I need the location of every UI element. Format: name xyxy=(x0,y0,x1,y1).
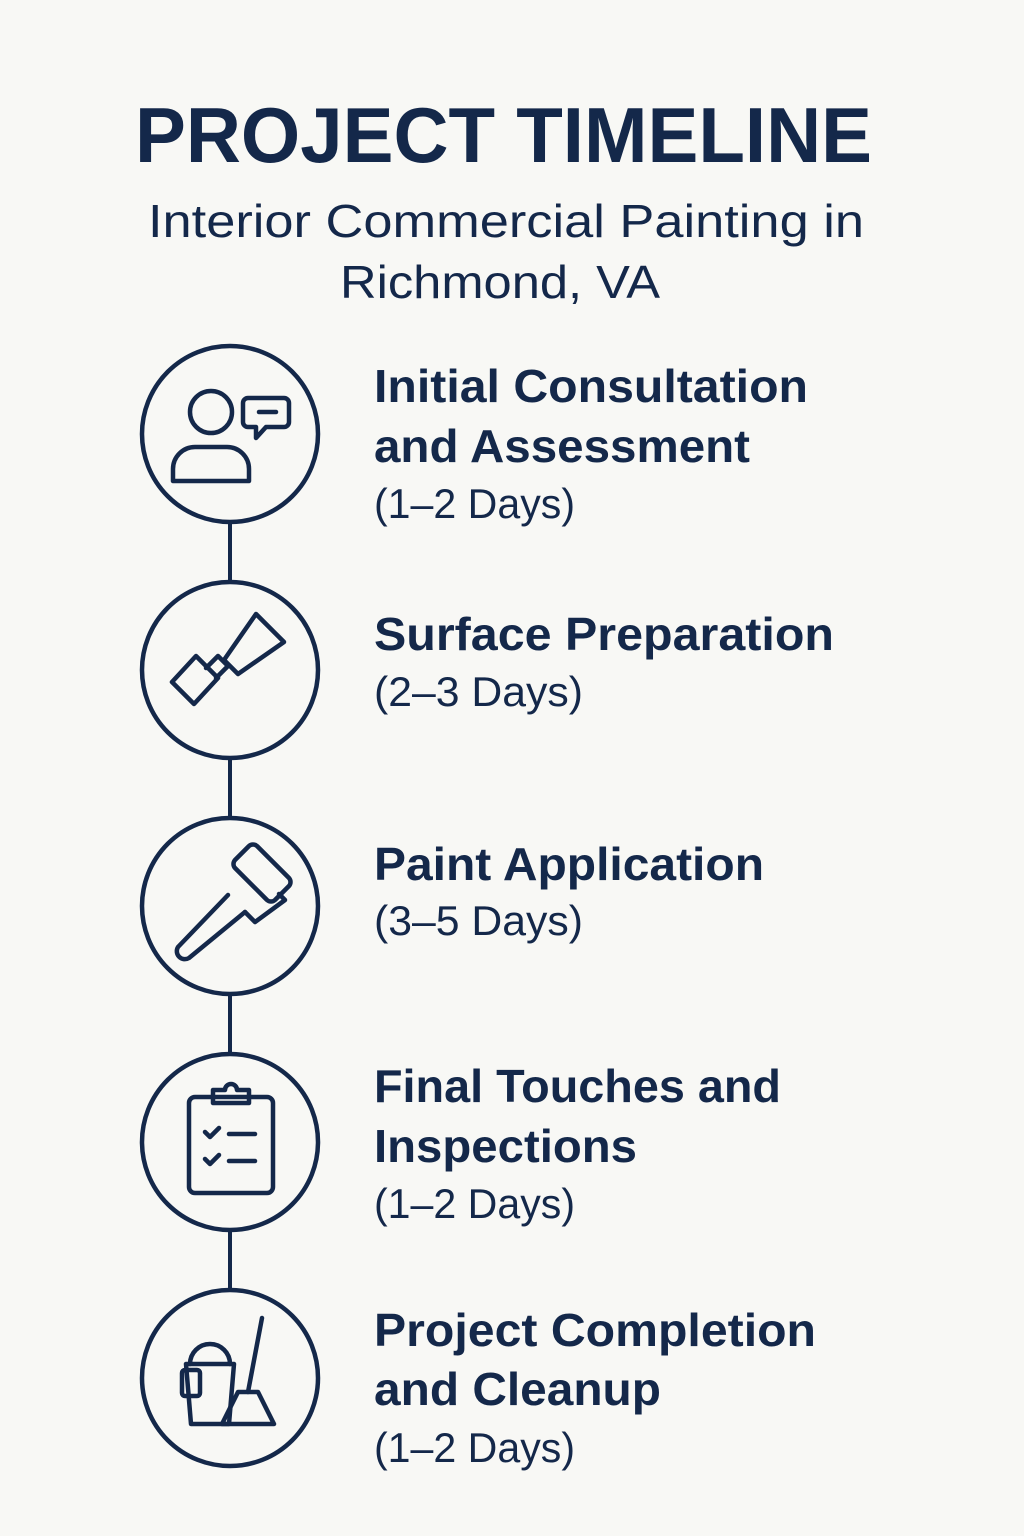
icon: clipboard checklist xyxy=(142,1054,318,1230)
text: step 4: Final Touches and xyxy=(374,1060,781,1112)
text: step 5: (1–2 Days) xyxy=(374,1424,575,1471)
text: step 5: Project Completion xyxy=(374,1304,816,1356)
subtitle: Interior Commercial Painting in xyxy=(148,195,864,247)
text: step 3 xyxy=(374,838,764,944)
step 3 xyxy=(142,818,764,994)
icon: bucket and broom xyxy=(142,1290,318,1466)
icon: paint roller xyxy=(142,818,318,994)
text: step 3: (3–5 Days) xyxy=(374,897,583,944)
text: step 1 xyxy=(374,360,808,527)
text: step 4: Inspections xyxy=(374,1120,637,1172)
text: step 2: (2–3 Days) xyxy=(374,668,583,715)
icon: putty knife xyxy=(142,582,318,758)
text: step 3: Paint Application xyxy=(374,838,764,890)
text: step 4: (1–2 Days) xyxy=(374,1180,575,1227)
subtitle: Richmond, VA xyxy=(340,256,660,308)
step 2 xyxy=(142,582,834,758)
icon: consultation xyxy=(142,346,318,522)
subtitle xyxy=(148,195,864,308)
timeline connector xyxy=(228,520,232,1295)
text: step 1: and Assessment xyxy=(374,420,750,472)
step 1 xyxy=(142,346,808,527)
text: step 4 xyxy=(374,1060,781,1227)
step 4 xyxy=(142,1054,781,1230)
text: step 5 xyxy=(374,1304,816,1471)
step 5 xyxy=(142,1290,816,1471)
title: PROJECT TIMELINE xyxy=(135,91,872,179)
text: step 1: Initial Consultation xyxy=(374,360,808,412)
text: step 1: (1–2 Days) xyxy=(374,480,575,527)
text: step 2 xyxy=(374,608,834,715)
text: step 5: and Cleanup xyxy=(374,1363,661,1415)
text: step 2: Surface Preparation xyxy=(374,608,834,660)
